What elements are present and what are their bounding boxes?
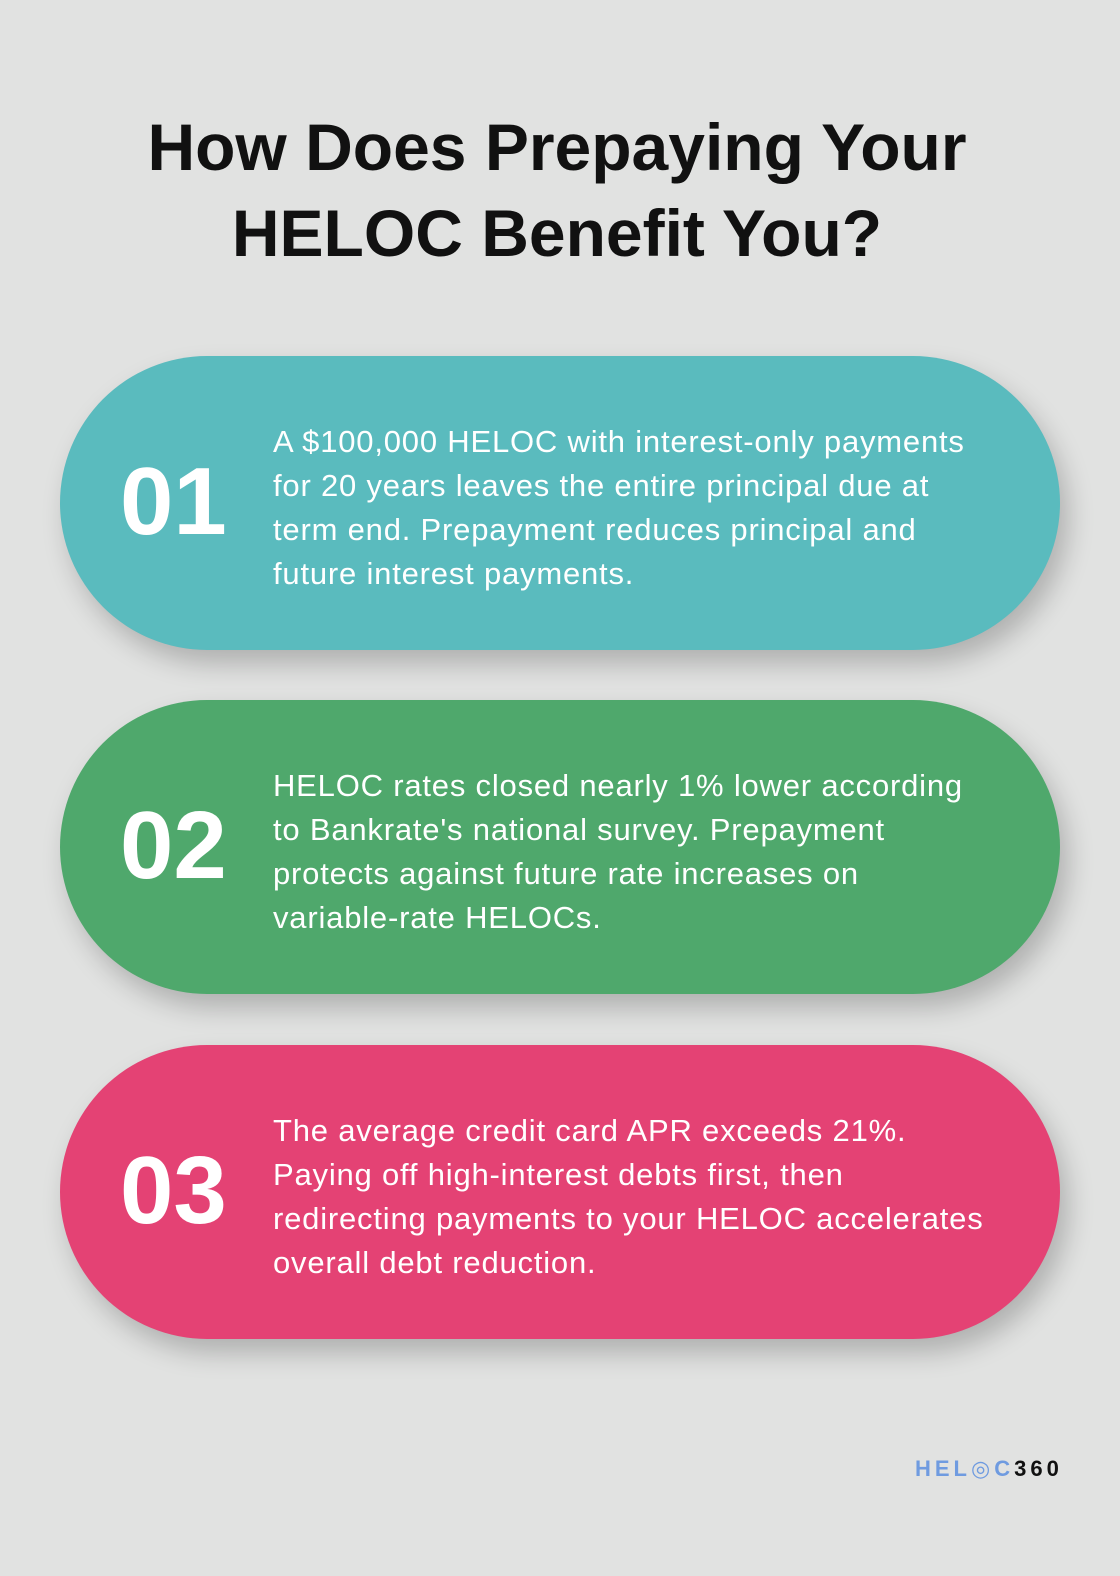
text 02: variable-rate HELOCs. xyxy=(273,900,602,935)
text 01 xyxy=(273,424,965,591)
text 03: redirecting payments to your HELOC accelerates xyxy=(273,1201,984,1236)
text 02: to Bankrate's national survey. Prepayment xyxy=(273,812,885,847)
panel: 03 xyxy=(60,1045,1060,1339)
title: How Does Prepaying Your xyxy=(147,110,967,184)
text 01: future interest payments. xyxy=(273,556,634,591)
text 02: protects against future rate increases on xyxy=(273,856,859,891)
text 03: Paying off high-interest debts first, then xyxy=(273,1157,844,1192)
text 03 xyxy=(273,1113,984,1280)
number 02: 02 xyxy=(120,792,227,899)
text 01: A $100,000 HELOC with interest-only payments xyxy=(273,424,965,459)
text 01: for 20 years leaves the entire principal due at xyxy=(273,468,929,503)
number 03: 03 xyxy=(120,1137,227,1244)
number 01: 01 xyxy=(120,448,227,555)
text 02 xyxy=(273,768,963,935)
text 02: HELOC rates closed nearly 1% lower according xyxy=(273,768,963,803)
text 01: term end. Prepayment reduces principal and xyxy=(273,512,917,547)
text 03: The average credit card APR exceeds 21%. xyxy=(273,1113,906,1148)
panel: 02 xyxy=(60,700,1060,994)
title: HELOC Benefit You? xyxy=(232,196,882,270)
panel: 01 xyxy=(60,356,1060,650)
logo: HEL◎C360 xyxy=(915,1456,1063,1481)
text 03: overall debt reduction. xyxy=(273,1245,596,1280)
title xyxy=(147,110,967,270)
